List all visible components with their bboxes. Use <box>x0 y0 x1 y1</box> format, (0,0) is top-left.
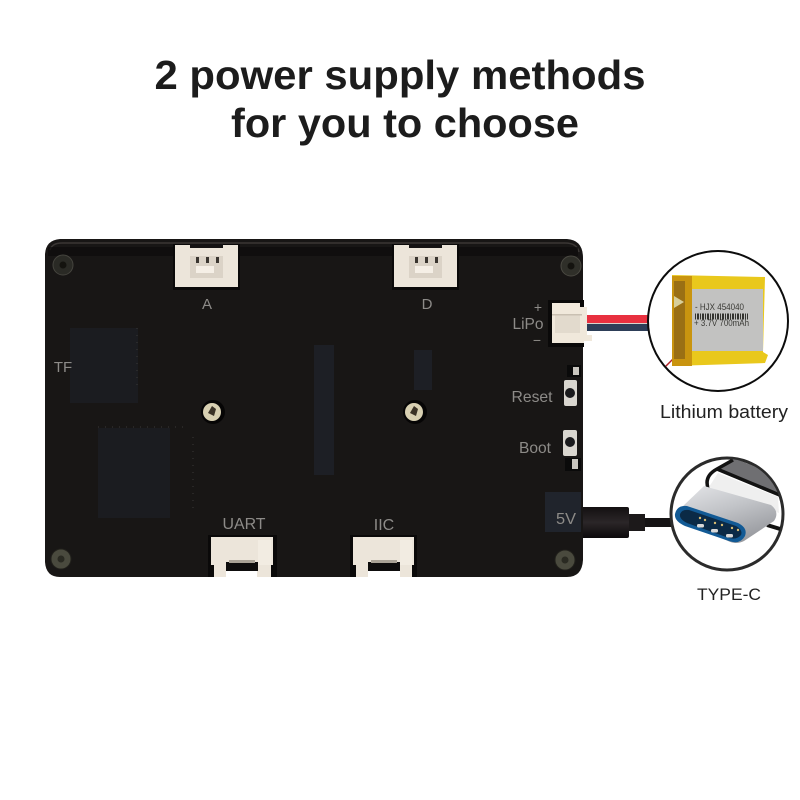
battery body <box>672 275 768 366</box>
title: 2 power supply methods <box>154 52 646 98</box>
connector LiPo <box>548 300 592 347</box>
board labels: − <box>533 332 541 348</box>
button: reset <box>564 365 581 406</box>
board labels: + <box>534 299 542 315</box>
connector face <box>675 506 746 542</box>
battery body: - HJX 454040 <box>695 302 744 312</box>
board labels: LiPo <box>512 316 544 333</box>
battery body: + 3.7V 700mAh <box>694 318 749 328</box>
screw: bottom right <box>555 550 575 570</box>
board labels: 5V <box>556 511 576 528</box>
screw: top right <box>561 256 581 276</box>
standoff screw: left <box>201 400 225 424</box>
board labels: UART <box>222 516 266 533</box>
board labels <box>54 296 576 534</box>
battery wires <box>585 315 653 331</box>
board labels: Boot <box>519 440 552 457</box>
connector UART <box>208 535 277 578</box>
label: type-c: TYPE-C <box>697 585 761 604</box>
callout: type-c <box>671 458 790 570</box>
board labels: TF <box>54 359 72 376</box>
label: lithium battery: Lithium battery <box>660 402 788 422</box>
cable boot <box>721 459 778 494</box>
board <box>45 239 592 578</box>
screw: top left <box>53 255 73 275</box>
collar <box>709 473 779 513</box>
connector IIC <box>350 535 417 578</box>
board labels: Reset <box>512 389 553 406</box>
button: boot <box>563 430 581 471</box>
board labels: A <box>202 296 212 313</box>
title <box>154 52 646 146</box>
USB cable <box>580 507 674 538</box>
standoff screw: right <box>403 400 427 424</box>
callout: lithium battery <box>648 251 788 391</box>
screw: bottom left <box>51 549 71 569</box>
title: for you to choose <box>231 100 579 146</box>
usb-c plug <box>682 486 776 543</box>
board labels: IIC <box>374 517 394 534</box>
connector D <box>392 244 459 290</box>
faint board traces <box>70 328 581 532</box>
board labels: D <box>422 296 433 313</box>
connector A <box>173 244 240 290</box>
